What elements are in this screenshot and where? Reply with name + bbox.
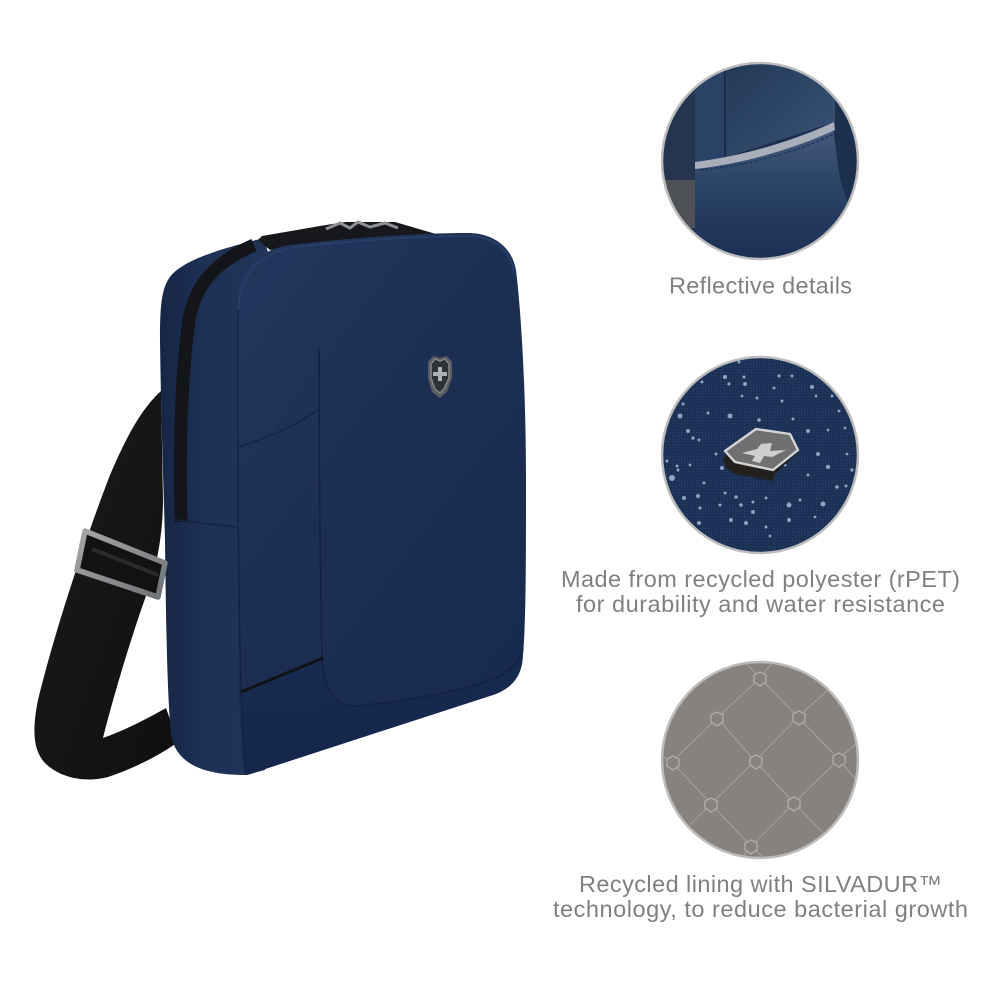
strap buckle xyxy=(77,531,165,597)
zipper top pull xyxy=(258,222,436,250)
label: recycled polyester: Made from recycled polyester (rPET) xyxy=(561,566,960,592)
small shield emblems xyxy=(667,672,845,854)
grey lining fabric xyxy=(660,660,860,860)
bottom reinforced panel xyxy=(241,648,523,775)
zipper track xyxy=(180,245,254,522)
stitches xyxy=(700,134,834,170)
circle: reflective details xyxy=(660,60,860,264)
fabric background xyxy=(690,100,857,232)
zipper sliders xyxy=(326,222,398,229)
bag side panel xyxy=(160,238,270,775)
front edge seam xyxy=(238,236,514,310)
bottom zip xyxy=(241,658,323,692)
woven fabric xyxy=(660,355,860,555)
grey tab xyxy=(664,180,695,228)
circle: recycled lining pattern xyxy=(660,660,860,860)
crossbody bag product photo xyxy=(34,222,526,779)
label: reflective details: Reflective details xyxy=(669,272,852,298)
side panel lower seam xyxy=(165,518,238,527)
label: recycled lining: Recycled lining with SILVADUR™ xyxy=(579,871,942,897)
reflective band xyxy=(695,122,835,169)
zipper tape band xyxy=(695,70,727,162)
front left edge line xyxy=(238,310,245,772)
brand shield logo xyxy=(428,356,452,398)
circle: recycled polyester with water drops xyxy=(660,355,860,555)
tilted shield badge xyxy=(723,429,798,481)
shoulder strap xyxy=(34,391,178,779)
ring xyxy=(662,662,858,858)
pocket diagonal seam xyxy=(238,409,319,447)
diamond lattice xyxy=(660,662,860,860)
water droplets xyxy=(666,360,854,537)
front pocket panel seam xyxy=(319,350,523,706)
ring xyxy=(662,357,858,553)
ring xyxy=(662,63,858,259)
bag front body xyxy=(237,233,526,775)
pocket xyxy=(695,130,848,244)
label: durability and water resistance: for durability and water resistance xyxy=(576,591,945,617)
upper fabric xyxy=(727,60,835,157)
label: technology: technology, to reduce bacterial growth xyxy=(553,896,968,922)
left woven panel xyxy=(664,90,695,180)
